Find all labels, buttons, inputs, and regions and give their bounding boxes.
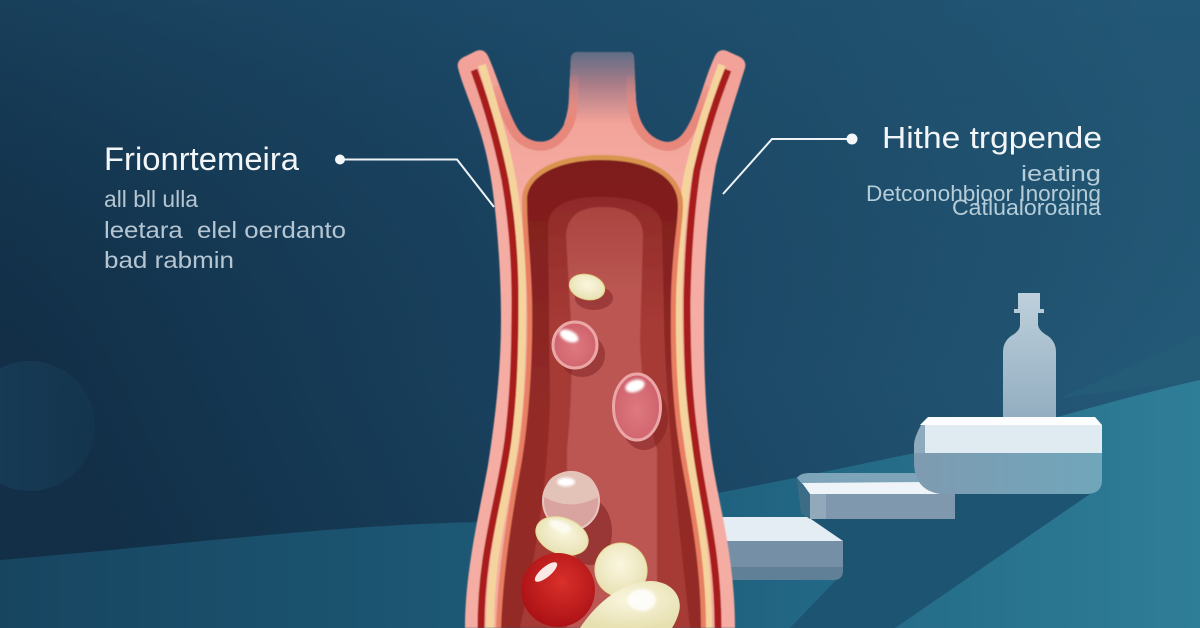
artery cross-section (458, 50, 745, 628)
right heading: Hithe trgpende (882, 120, 1102, 155)
step: lower slab (715, 517, 843, 580)
pill: pink lower (614, 374, 668, 450)
right body text: Detconohbjoor Inoroing (866, 181, 1101, 206)
red pill (521, 553, 595, 627)
right leader line (723, 134, 858, 194)
right text block (866, 120, 1102, 220)
cream pill left (530, 510, 594, 562)
left leader line (335, 154, 494, 207)
step: middle slab (797, 473, 955, 519)
left body text: all bll ulla (104, 186, 198, 212)
neck fade (564, 52, 641, 124)
icon: bottle (1003, 293, 1056, 417)
pill: small cream (567, 271, 613, 310)
lumen inner shading (520, 197, 690, 628)
right body text: ieating (1021, 161, 1101, 186)
wall cream bands (482, 65, 722, 628)
translucent pill (543, 472, 599, 530)
right body text: Catlualoroaina (952, 195, 1102, 220)
left body text: bad rabmin (104, 247, 234, 273)
pill shadow (568, 499, 612, 565)
wall red bands (474, 70, 728, 628)
lumen gold rim (501, 160, 701, 628)
pill cluster (521, 472, 680, 628)
vessel outer wall (458, 50, 745, 628)
left body text: leetara elel oerdanto (104, 217, 346, 243)
step: top slab (914, 417, 1102, 494)
left heading: Frionrtemeira (104, 141, 299, 177)
valley shading (500, 75, 704, 142)
cream pill large (580, 581, 680, 628)
lumen (501, 160, 701, 628)
right body text (866, 161, 1102, 220)
pill: pink upper (553, 322, 605, 377)
step shadow (790, 494, 1090, 628)
bottom wave (0, 380, 1200, 628)
left body text (104, 186, 346, 273)
cream pill centre (590, 538, 652, 602)
left text block (104, 141, 346, 273)
